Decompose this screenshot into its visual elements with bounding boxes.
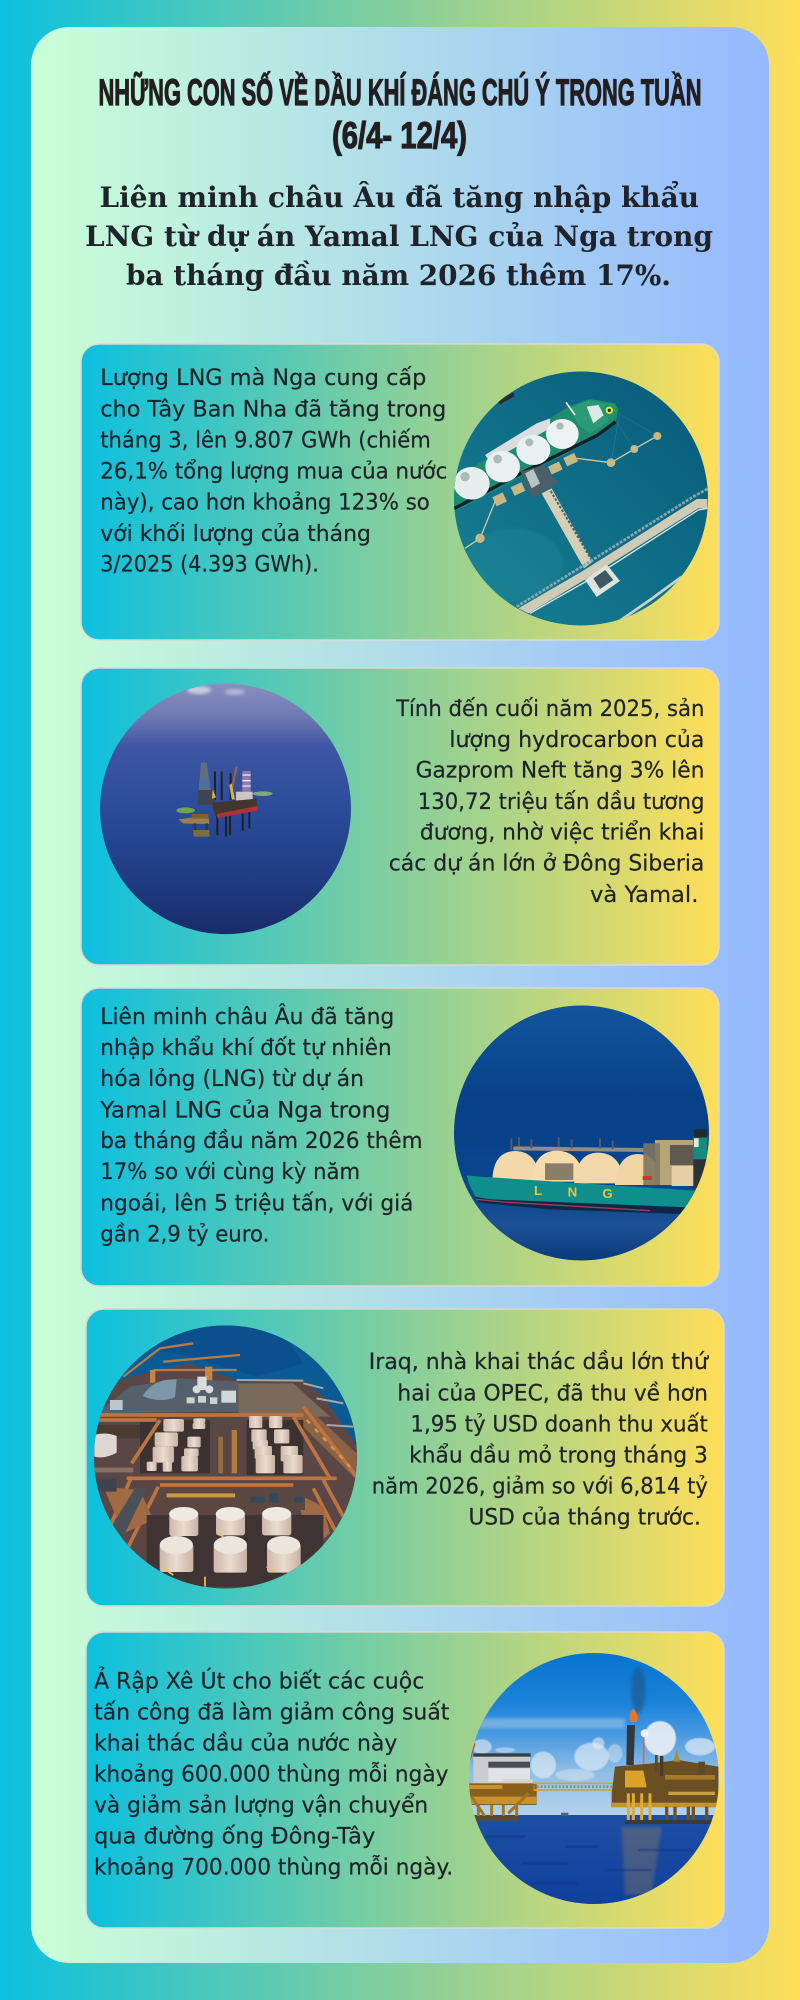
card 3 text: Liên minh châu Âu đã tăng	[100, 1002, 394, 1030]
card 4 text: USD của tháng trước.	[468, 1504, 701, 1530]
image: LNG carrier on blue sea: N	[568, 1185, 577, 1200]
card 5 text: tấn công đã làm giảm công suất	[94, 1699, 450, 1725]
card 4 text: 1,95 tỷ USD doanh thu xuất	[410, 1412, 708, 1438]
legs	[215, 772, 249, 837]
funnel	[693, 1137, 707, 1160]
T head	[585, 564, 620, 597]
ship	[453, 399, 618, 512]
image: refinery tank farm at dusk	[90, 1320, 362, 1589]
card 1 text: 26,1% tổng lượng mua của nước	[100, 458, 447, 484]
card 3 text: 17% so với cùng kỳ năm	[100, 1159, 360, 1185]
card 1 text: với khối lượng của tháng	[100, 521, 371, 547]
pipe rack	[513, 1148, 643, 1150]
main jetty	[518, 499, 707, 613]
title	[98, 71, 702, 156]
panel: card 3 EU imports	[81, 988, 719, 1286]
card 2 text	[389, 696, 704, 908]
drill stack	[242, 771, 251, 792]
dark tank bunds	[140, 1420, 210, 1473]
subtitle	[85, 180, 713, 292]
right platform	[612, 1760, 718, 1807]
lower jetty	[618, 577, 682, 622]
panel: card 5 Saudi Arabia	[86, 1632, 724, 1928]
card 4 text: khẩu dầu mỏ trong tháng 3	[409, 1443, 708, 1469]
card 4 text	[369, 1349, 710, 1530]
helidecks	[253, 791, 273, 796]
image: LNG tanker at jetty	[453, 371, 708, 626]
hull	[467, 1175, 695, 1209]
trestle	[542, 488, 593, 568]
card 2 text: Gazprom Neft tăng 3% lên	[416, 758, 704, 784]
cloud streak	[478, 1718, 625, 1728]
water reflections	[622, 1827, 662, 1895]
card 4 text: năm 2026, giảm so với 6,814 tỷ	[372, 1474, 708, 1500]
card 1 text: cho Tây Ban Nha đã tăng trong	[100, 396, 446, 422]
card 5 text: khai thác dầu của nước này	[94, 1730, 397, 1756]
deck	[236, 792, 253, 800]
card 5 text	[94, 1665, 453, 1880]
distant rig	[561, 1813, 568, 1816]
large storage tanks	[160, 1507, 301, 1573]
card 1 text: này), cao hơn khoảng 123% so	[100, 490, 430, 516]
panel: card 1 Spain LNG	[81, 344, 719, 640]
card 3 text: nhập khẩu khí đốt tự nhiên	[100, 1035, 392, 1061]
panel: card 2 Gazprom Neft	[81, 668, 719, 965]
card 4 text: Iraq, nhà khai thác dầu lớn thứ	[369, 1349, 710, 1375]
smoke	[631, 1667, 646, 1713]
card 1 text	[100, 365, 447, 578]
left platform	[178, 815, 209, 824]
small tanks block	[232, 1430, 237, 1473]
flare tower	[626, 1725, 635, 1765]
mooring dolphins	[465, 436, 657, 548]
image: LNG carrier on blue sea	[454, 1005, 709, 1261]
card 3 text: ngoái, lên 5 triệu tấn, với giá	[100, 1190, 413, 1216]
card 2 text: các dự án lớn ở Đông Siberia	[389, 851, 704, 877]
image: offshore platforms with flare	[468, 1653, 719, 1905]
ship name: L	[534, 1183, 542, 1198]
card 2 text: Tính đến cuối năm 2025, sản	[395, 696, 704, 722]
roads	[97, 1407, 357, 1547]
subtitle: Liên minh châu Âu đã tăng nhập khẩu	[100, 180, 699, 214]
quay	[123, 1343, 240, 1377]
image: offshore rig at sea	[100, 683, 352, 935]
loading platform	[521, 465, 558, 499]
card 1 text: tháng 3, lên 9.807 GWh (chiếm	[100, 427, 431, 453]
card 5 text: khoảng 700.000 thùng mỗi ngày.	[94, 1852, 453, 1880]
superstructure	[655, 1140, 693, 1185]
derrick	[199, 763, 211, 790]
card 5 text: khoảng 600.000 thùng mỗi ngày	[94, 1759, 448, 1787]
card 2 text: lượng hydrocarbon của	[449, 727, 704, 753]
small boat	[497, 392, 515, 404]
card 2 text: và Yamal.	[590, 882, 698, 908]
domes	[492, 1151, 540, 1180]
card 3 text: Yamal LNG của Nga trong	[99, 1097, 390, 1123]
card 5 text: và giảm sản lượng vận chuyển	[94, 1792, 428, 1818]
containment and big tank yard	[147, 1515, 323, 1587]
card 1 text: 3/2025 (4.393 GWh).	[100, 552, 319, 578]
card 3 text: gần 2,9 tỷ euro.	[100, 1221, 269, 1247]
image: LNG carrier on blue sea: G	[602, 1186, 613, 1201]
card 1 text: Lượng LNG mà Nga cung cấp	[100, 365, 426, 391]
water	[118, 1326, 356, 1445]
process area	[97, 1378, 238, 1413]
bridge	[533, 1783, 617, 1790]
card 3 text	[99, 1002, 423, 1247]
clouds	[472, 1721, 715, 1781]
card 5 text: Ả Rập Xê Út cho biết các cuộc	[94, 1665, 424, 1694]
panel: card 4 Iraq	[86, 1309, 724, 1606]
card 2 text: đương, nhờ việc triển khai	[420, 820, 704, 846]
card 3 text: ba tháng đầu năm 2026 thêm	[100, 1128, 423, 1154]
card 2 text: 130,72 triệu tấn dầu tương	[418, 789, 704, 815]
card 5 text: qua đường ống Đông-Tây	[94, 1823, 375, 1849]
subtitle: ba tháng đầu năm 2026 thêm 17%.	[126, 259, 671, 292]
subtitle: LNG từ dự án Yamal LNG của Nga trong	[85, 220, 713, 253]
card 4 text: hai của OPEC, đã thu về hơn	[397, 1380, 708, 1406]
card 3 text: hóa lỏng (LNG) từ dự án	[100, 1066, 364, 1092]
title: (6/4- 12/4)	[332, 114, 467, 156]
left platform	[473, 1755, 530, 1783]
